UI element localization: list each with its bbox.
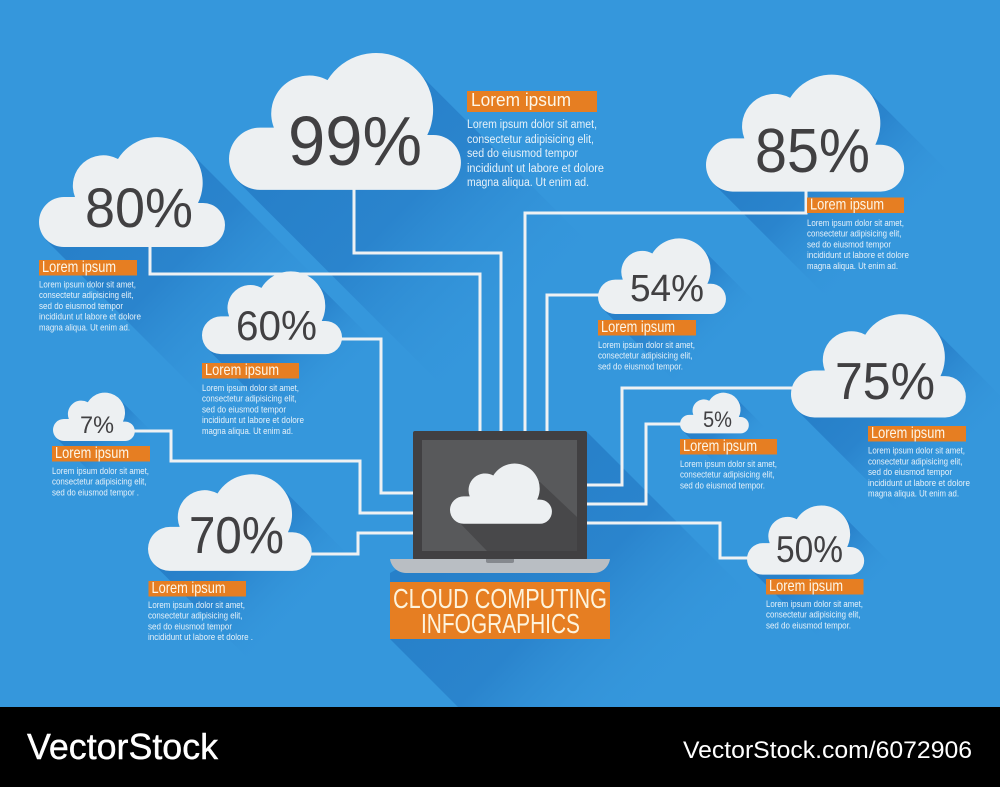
connector lines	[130, 188, 806, 558]
description: Lorem ipsum dolor sit amet,	[598, 340, 695, 350]
description	[598, 340, 695, 371]
label text: Lorem ipsum	[601, 319, 675, 336]
panel: 54%	[598, 238, 726, 371]
description	[39, 280, 141, 332]
description	[202, 383, 304, 436]
description: Lorem ipsum dolor sit amet,	[202, 383, 299, 393]
description: Lorem ipsum dolor sit amet,	[52, 466, 149, 476]
description	[868, 446, 970, 498]
description: Lorem ipsum dolor sit amet,	[766, 599, 863, 609]
description: sed do eiusmod tempor	[202, 404, 286, 414]
cloud	[39, 137, 225, 247]
panel: 7%	[52, 393, 150, 497]
panel: 85%	[706, 75, 909, 271]
footer url: VectorStock.com/6072906	[683, 737, 972, 764]
footer bar	[0, 707, 1000, 787]
description	[148, 600, 253, 642]
label	[807, 198, 904, 213]
panel: 99%	[229, 53, 604, 190]
description: sed do eiusmod tempor.	[766, 620, 851, 630]
description: sed do eiusmod tempor	[148, 621, 232, 631]
panel: 80%	[39, 137, 225, 332]
label text: Lorem ipsum	[471, 90, 571, 110]
description: incididunt ut labore et dolore .	[148, 632, 253, 642]
description: sed do eiusmod tempor	[807, 239, 891, 249]
description: magna aliqua. Ut enim ad.	[807, 261, 898, 271]
title	[390, 582, 610, 639]
label text: Lorem ipsum	[55, 445, 129, 462]
laptop notch	[486, 559, 514, 563]
panel: 50%	[747, 505, 864, 630]
panel: 75%	[791, 314, 970, 498]
label text: Lorem ipsum	[810, 196, 884, 214]
title line 1: CLOUD COMPUTING	[393, 583, 607, 614]
label	[148, 581, 246, 596]
description: consectetur adipisicing elit,	[39, 290, 134, 300]
laptop screen	[422, 440, 577, 551]
laptop base	[390, 559, 610, 573]
description: magna aliqua. Ut enim ad.	[467, 177, 589, 189]
description: sed do eiusmod tempor .	[52, 487, 139, 497]
description: Lorem ipsum dolor sit amet,	[39, 280, 136, 290]
description: Lorem ipsum dolor sit amet,	[467, 119, 597, 131]
description: Lorem ipsum dolor sit amet,	[807, 218, 904, 228]
label	[766, 579, 864, 594]
description: incididunt ut labore et dolore	[467, 163, 604, 175]
panel: 60%	[202, 271, 342, 436]
number: 85%	[755, 117, 870, 186]
description: magna aliqua. Ut enim ad.	[202, 426, 293, 436]
label text: Lorem ipsum	[683, 438, 757, 455]
panel: 5%	[680, 393, 777, 490]
cloud	[680, 393, 749, 433]
label	[52, 446, 150, 462]
description: consectetur adipisicing elit,	[52, 477, 146, 487]
description: consectetur adipisicing elit,	[766, 610, 860, 620]
description	[766, 599, 863, 630]
description: magna aliqua. Ut enim ad.	[39, 322, 130, 332]
label text: Lorem ipsum	[42, 259, 116, 276]
cloud	[706, 75, 904, 192]
number: 50%	[776, 529, 843, 570]
description: Lorem ipsum dolor sit amet,	[680, 459, 777, 469]
description: consectetur adipisicing elit,	[202, 394, 296, 404]
description: incididunt ut labore et dolore	[807, 250, 909, 260]
title line 2: INFOGRAPHICS	[421, 608, 580, 639]
description: consectetur adipisicing elit,	[868, 456, 962, 466]
description: sed do eiusmod tempor	[39, 301, 123, 311]
description	[52, 466, 149, 497]
cloud	[148, 474, 312, 571]
description: consectetur adipisicing elit,	[148, 611, 242, 621]
number: 60%	[236, 302, 317, 349]
description	[807, 218, 909, 271]
description: consectetur adipisicing elit,	[807, 229, 902, 239]
description: sed do eiusmod tempor.	[680, 480, 765, 490]
icon: cloud on screen	[450, 464, 552, 524]
description: consectetur adipisicing elit,	[598, 351, 692, 361]
number: 5%	[703, 407, 732, 432]
description: incididunt ut labore et dolore	[39, 312, 141, 322]
label	[39, 260, 137, 276]
number: 7%	[80, 412, 114, 439]
cloud	[791, 314, 966, 417]
label	[467, 91, 597, 112]
label	[598, 320, 696, 336]
label text: Lorem ipsum	[152, 580, 226, 597]
laptop body	[413, 431, 587, 560]
label text: Lorem ipsum	[769, 578, 843, 595]
description: consectetur adipisicing elit,	[680, 470, 774, 480]
cloud	[747, 505, 864, 575]
description: Lorem ipsum dolor sit amet,	[148, 600, 245, 610]
description: incididunt ut labore et dolore	[202, 415, 304, 425]
number: 75%	[835, 353, 935, 411]
label	[868, 426, 966, 442]
panel: 70%	[148, 474, 312, 642]
laptop	[390, 431, 610, 573]
number: 70%	[189, 507, 284, 565]
cloud	[202, 271, 342, 354]
description	[467, 119, 604, 189]
description: consectetur adipisicing elit,	[467, 134, 594, 146]
number: 99%	[288, 102, 422, 180]
description: sed do eiusmod tempor	[868, 467, 952, 477]
description: Lorem ipsum dolor sit amet,	[868, 446, 965, 456]
label	[680, 439, 777, 454]
number: 80%	[85, 176, 193, 239]
description: magna aliqua. Ut enim ad.	[868, 488, 959, 498]
description: sed do eiusmod tempor	[467, 148, 578, 160]
label text: Lorem ipsum	[871, 425, 945, 442]
cloud	[53, 393, 135, 441]
cloud	[229, 53, 461, 190]
description: incididunt ut labore et dolore	[868, 478, 970, 488]
description	[680, 459, 777, 490]
cloud	[598, 238, 726, 314]
number: 54%	[630, 268, 704, 310]
footer logo: VectorStock	[27, 726, 219, 767]
description: sed do eiusmod tempor.	[598, 361, 683, 371]
label	[202, 363, 299, 378]
title box	[390, 582, 610, 639]
label text: Lorem ipsum	[205, 362, 279, 379]
screen cloud shadow	[457, 482, 577, 551]
